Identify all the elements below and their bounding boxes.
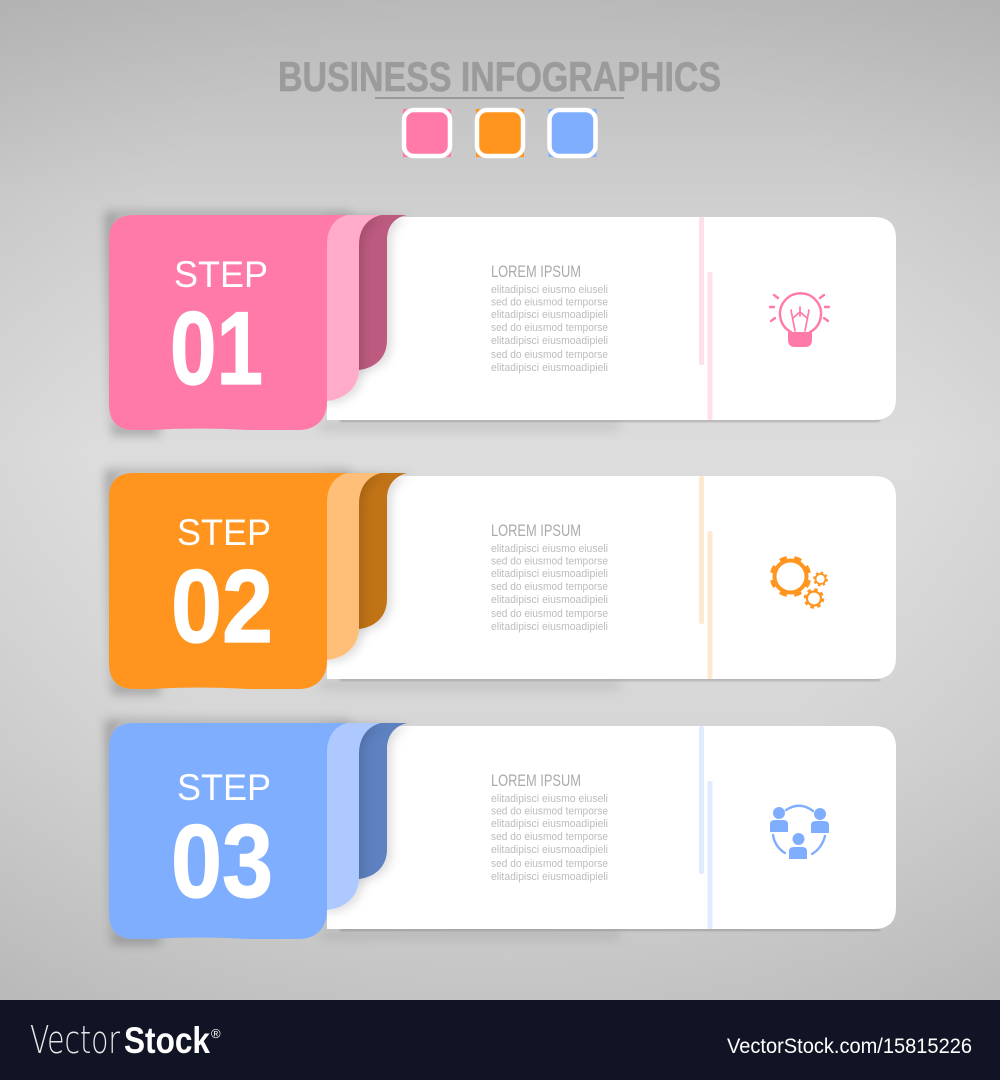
text block: sed do eiusmod temporse — [491, 296, 608, 308]
light ribbon — [320, 473, 381, 660]
white card — [327, 476, 896, 679]
footer logo: Stock — [124, 1020, 210, 1061]
step label: STEP — [174, 254, 268, 295]
tab shadow — [105, 212, 350, 435]
step label: STEP — [177, 512, 271, 553]
text block — [491, 772, 608, 883]
white card — [327, 726, 896, 929]
text block: elitadipisci eiusmo eiuseli — [491, 284, 608, 296]
vertical accent bars — [699, 217, 712, 420]
footer image id: VectorStock.com/15815226 — [727, 1034, 972, 1058]
soft shadow under card — [320, 680, 620, 690]
text block: LOREM IPSUM — [491, 263, 581, 281]
footer logo: Vector — [30, 1018, 120, 1062]
text block: sed do eiusmod temporse — [491, 858, 608, 870]
text block: elitadipisci eiusmoadipieli — [491, 594, 608, 606]
text block: elitadipisci eiusmoadipieli — [491, 871, 608, 883]
card shadow — [340, 679, 880, 680]
text block: sed do eiusmod temporse — [491, 581, 608, 593]
blue tab — [109, 723, 347, 939]
text block: sed do eiusmod temporse — [491, 806, 608, 818]
footer bar — [0, 1000, 1000, 1080]
text block: sed do eiusmod temporse — [491, 608, 608, 620]
step number: 01 — [170, 291, 263, 407]
icon: light bulb — [770, 293, 829, 347]
dark ribbon — [340, 215, 407, 370]
orange tab — [109, 473, 347, 689]
footer logo — [30, 1018, 221, 1062]
text block: elitadipisci eiusmoadipieli — [491, 818, 608, 830]
vertical accent bars — [699, 476, 712, 679]
panel: step 02 — [105, 470, 896, 694]
text block: sed do eiusmod temporse — [491, 349, 608, 361]
white card — [327, 217, 896, 420]
footer logo: ® — [211, 1026, 221, 1041]
light ribbon — [320, 723, 381, 910]
text block: elitadipisci eiusmo eiuseli — [491, 793, 608, 805]
card shadow — [340, 420, 880, 422]
soft shadow under card — [320, 421, 620, 431]
step number: 03 — [171, 804, 273, 920]
orange square — [476, 109, 524, 157]
text block: LOREM IPSUM — [491, 522, 581, 540]
dark ribbon — [340, 473, 407, 629]
text block: elitadipisci eiusmoadipieli — [491, 335, 608, 347]
panel: step 03 — [105, 720, 896, 944]
blue square — [548, 109, 596, 157]
light ribbon — [320, 215, 381, 401]
title: BUSINESS INFOGRAPHICS — [278, 53, 721, 100]
text block — [491, 522, 608, 633]
step number: 02 — [171, 549, 273, 665]
dark ribbon — [340, 723, 407, 879]
text block: sed do eiusmod temporse — [491, 831, 608, 843]
text block: elitadipisci eiusmoadipieli — [491, 621, 608, 633]
text block: elitadipisci eiusmo eiuseli — [491, 543, 608, 555]
text block: elitadipisci eiusmoadipieli — [491, 844, 608, 856]
text block: LOREM IPSUM — [491, 772, 581, 790]
text block: sed do eiusmod temporse — [491, 322, 608, 334]
card shadow — [340, 929, 880, 930]
title underline — [375, 97, 624, 99]
pink tab — [109, 215, 347, 430]
text block: elitadipisci eiusmoadipieli — [491, 309, 608, 321]
text block: elitadipisci eiusmoadipieli — [491, 362, 608, 374]
tab shadow — [105, 470, 350, 694]
panel: step 01 — [105, 212, 896, 435]
icon: team circle — [770, 806, 829, 859]
pink square — [403, 109, 451, 157]
step label: STEP — [177, 767, 271, 808]
icon: gears — [769, 555, 827, 608]
soft shadow under card — [320, 930, 620, 940]
color legend squares — [403, 109, 596, 157]
tab shadow — [105, 720, 350, 944]
text block: elitadipisci eiusmoadipieli — [491, 568, 608, 580]
vertical accent bars — [699, 726, 712, 929]
text block: sed do eiusmod temporse — [491, 556, 608, 568]
text block — [491, 263, 608, 374]
